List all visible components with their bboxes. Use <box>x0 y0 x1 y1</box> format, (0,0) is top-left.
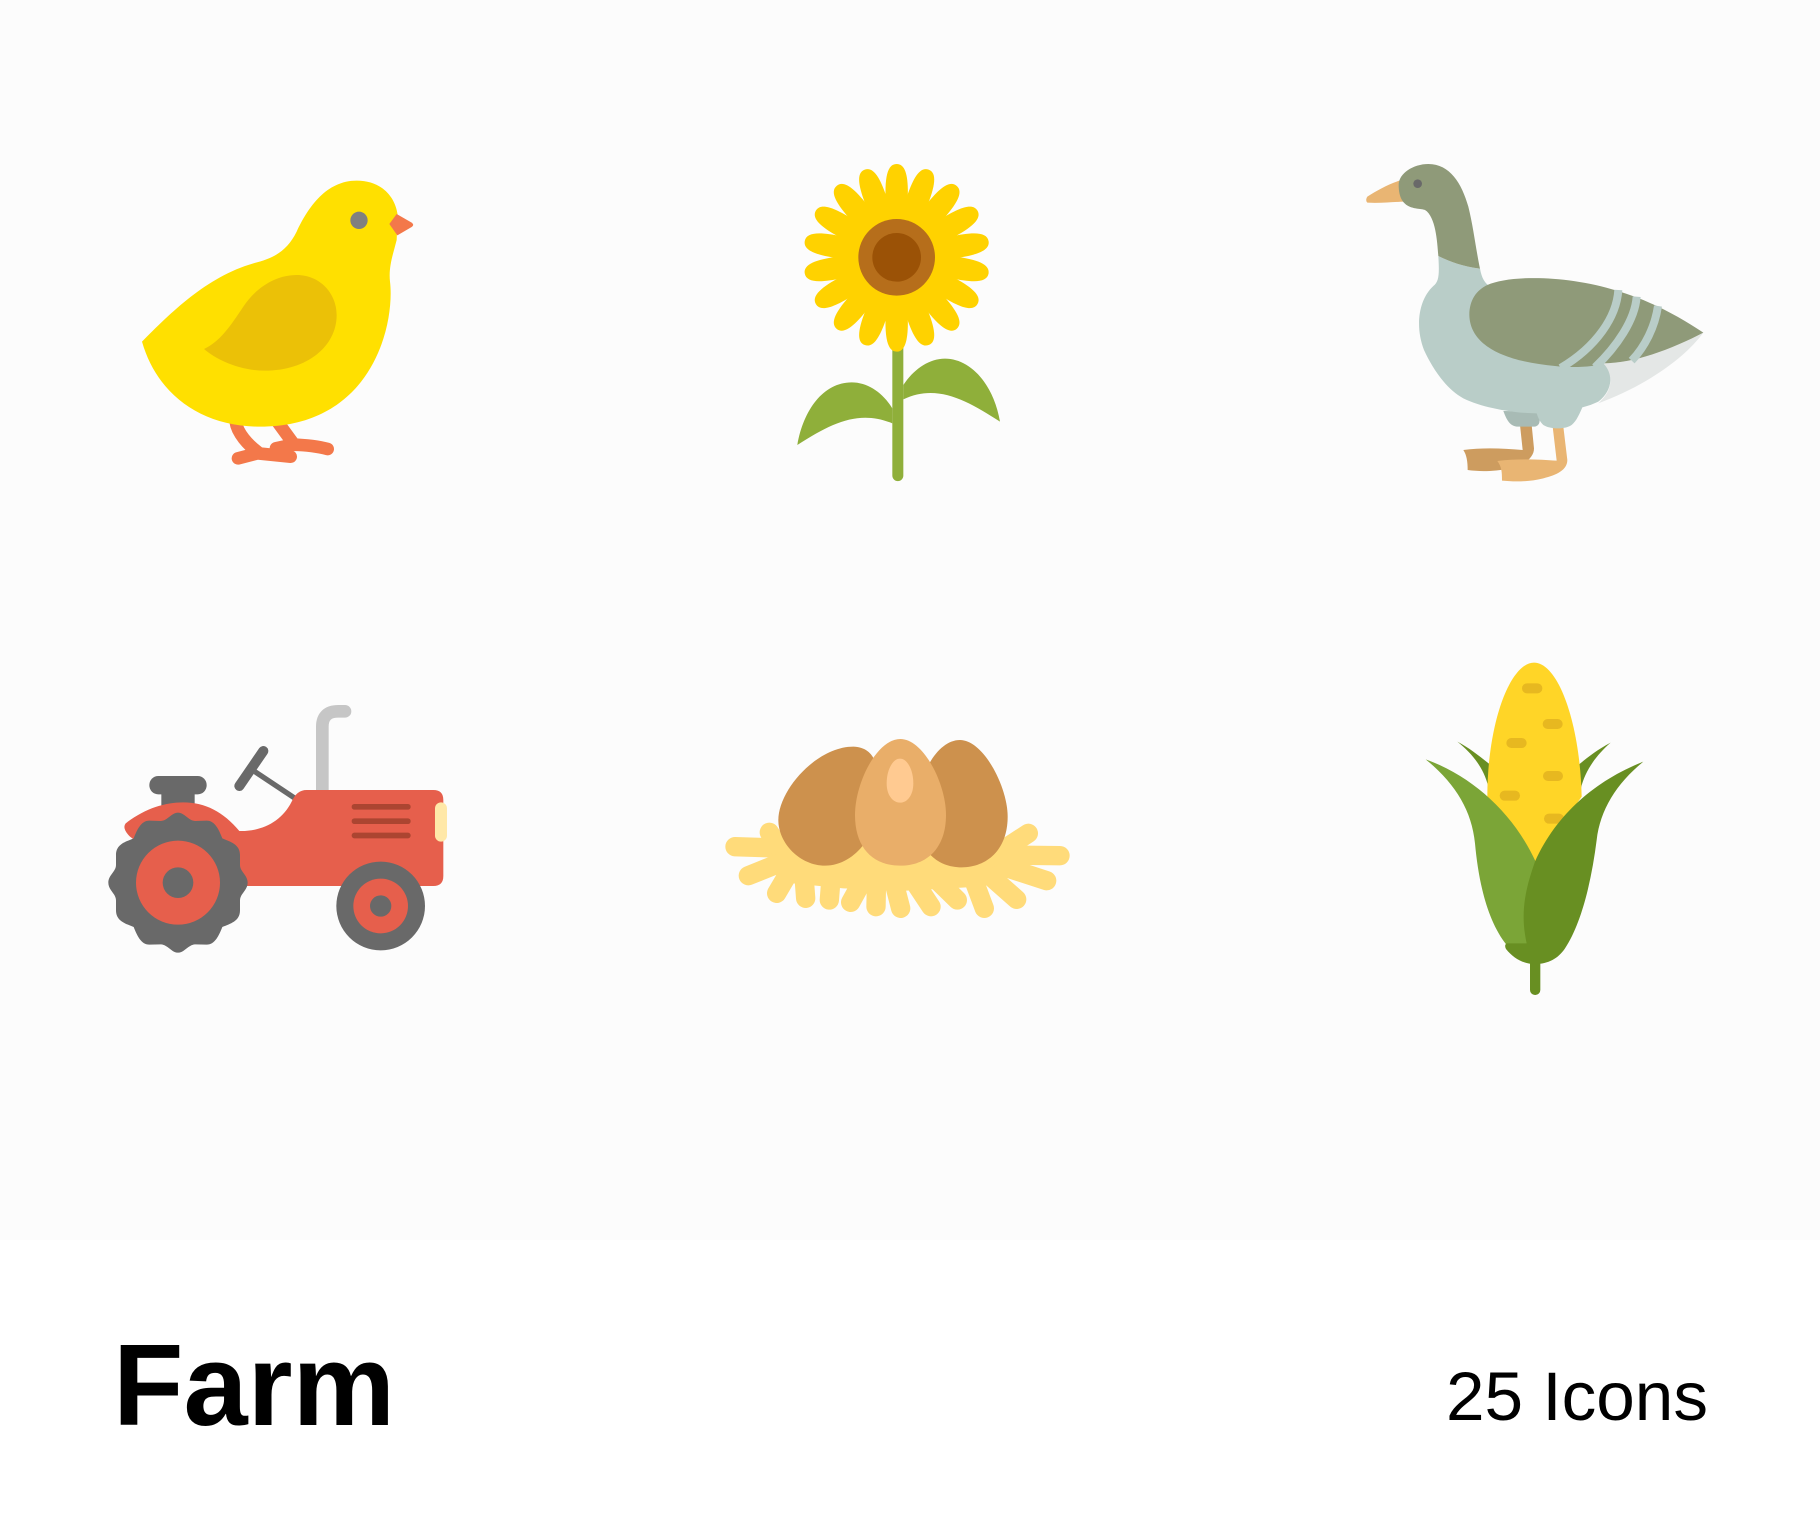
corn kernels <box>1500 683 1564 824</box>
icon: sunflower <box>797 164 1000 481</box>
icon: chick <box>142 181 413 458</box>
right egg <box>917 740 1008 867</box>
centre egg <box>855 739 946 866</box>
chick wing <box>204 275 337 371</box>
sunflower right leaf <box>903 359 1000 422</box>
goose front leg <box>1497 427 1567 481</box>
sunflower left leaf <box>797 382 892 445</box>
goose eye <box>1413 179 1422 188</box>
corn front right husk <box>1505 762 1643 964</box>
goose back thigh <box>1503 411 1540 427</box>
tractor rear wheel <box>108 813 248 953</box>
tractor exhaust pipe <box>322 711 345 797</box>
goose head and neck <box>1399 164 1480 269</box>
chick body <box>142 181 398 427</box>
goose back leg <box>1463 425 1534 471</box>
chick beak <box>389 214 413 235</box>
corn cob <box>1487 663 1582 863</box>
icon count label: 25 Icons <box>1446 1358 1708 1435</box>
goose beak <box>1366 181 1403 203</box>
tractor body <box>124 790 443 886</box>
icon: corn <box>1426 663 1643 995</box>
nest straw <box>735 832 1060 908</box>
corn stalk <box>1530 950 1540 995</box>
tractor engine stack <box>149 776 207 807</box>
goose body <box>1419 256 1610 428</box>
sunflower stem <box>892 337 903 481</box>
corn front left husk <box>1426 759 1537 945</box>
goose wing stripes <box>1561 290 1658 368</box>
sunflower disc <box>858 219 935 296</box>
chick eye <box>350 212 368 229</box>
tractor steering wheel <box>239 751 263 786</box>
sunflower petals <box>803 164 991 352</box>
egg highlight <box>887 759 913 803</box>
tractor steering rod <box>255 772 295 798</box>
icon: tractor <box>108 711 447 953</box>
sunflower disc centre <box>872 233 921 282</box>
icon: eggs in nest <box>735 739 1060 908</box>
goose wing <box>1469 278 1703 367</box>
corn back right leaf <box>1578 743 1611 789</box>
corn back left leaf <box>1457 742 1491 787</box>
goose tail <box>1598 333 1703 403</box>
tractor vents <box>352 804 411 838</box>
icon: goose <box>1366 164 1703 481</box>
tractor front wheel <box>336 862 425 950</box>
chick legs <box>236 422 328 458</box>
tractor headlight <box>435 802 447 842</box>
title: Farm <box>113 1320 395 1450</box>
left egg <box>778 747 880 866</box>
